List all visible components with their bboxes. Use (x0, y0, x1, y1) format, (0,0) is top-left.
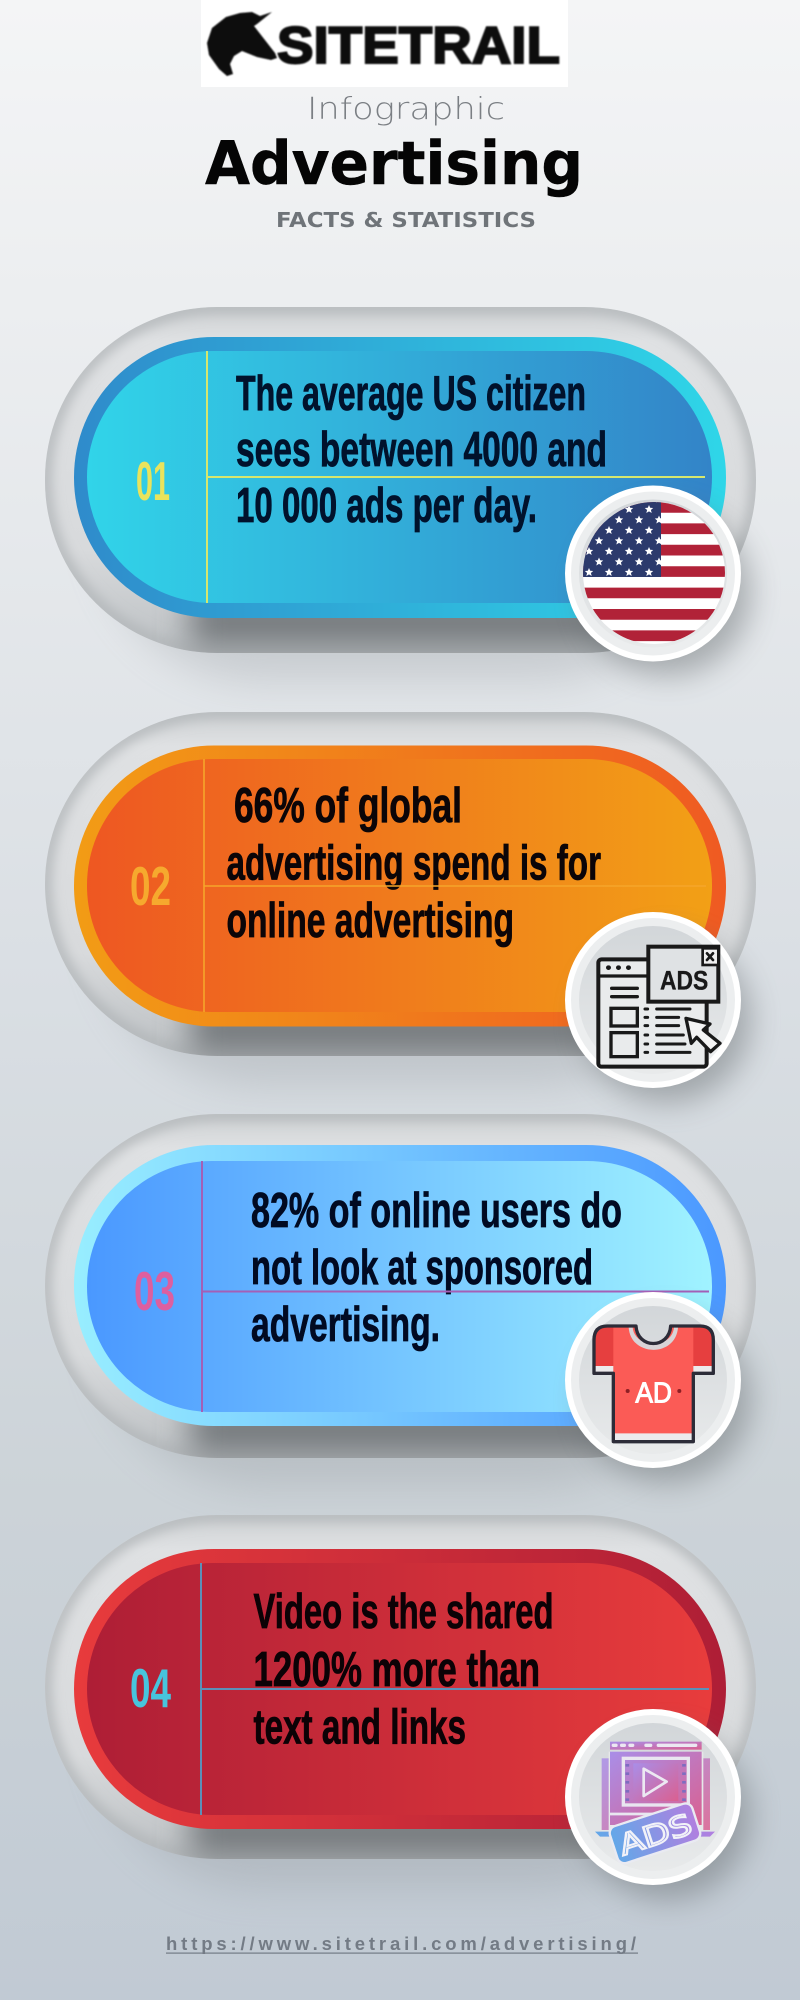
fact text 3: advertising. (251, 1298, 440, 1352)
icon: video ads badge (565, 1709, 751, 1900)
fact text 3: not look at sponsored (251, 1241, 593, 1295)
title: Advertising: Advertising (205, 129, 583, 199)
fact text 4: 1200% more than (254, 1643, 540, 1697)
icon: t-shirt badge: AD (635, 1378, 672, 1410)
fact text 1: sees between 4000 and (236, 423, 607, 477)
subtitle: FACTS & STATISTICS (276, 208, 536, 232)
fact text 2: advertising spend is for (226, 836, 601, 890)
heading: Infographic: Infographic (307, 92, 505, 127)
fact text 2 (226, 779, 601, 948)
panel: card 3 (45, 1114, 756, 1487)
fact text 4 (254, 1585, 554, 1754)
fact text 4: Video is the shared (254, 1585, 554, 1639)
fact text 1: The average US citizen (236, 367, 586, 421)
logo wordmark: SITETRAIL (277, 17, 560, 75)
fact text 3 (251, 1184, 622, 1352)
panel: card 4 (45, 1515, 756, 1888)
fact text 2: 66% of global (234, 779, 462, 833)
icon: ads browser window badge (565, 912, 751, 1103)
number 03: 03 (134, 1260, 175, 1322)
panel: card 2 (45, 712, 756, 1085)
fact text 1 (236, 367, 607, 533)
fact text 4: text and links (254, 1700, 466, 1754)
number 02: 02 (130, 855, 171, 917)
icon: t-shirt badge (565, 1292, 751, 1483)
icon: US flag badge (565, 486, 751, 676)
icon: unicorn head (207, 12, 277, 76)
icon: ads browser window badge: ADS (660, 965, 708, 995)
fact text 1: 10 000 ads per day. (236, 479, 537, 533)
logo: SITETRAIL (201, 0, 568, 87)
number 04: 04 (130, 1657, 171, 1719)
number 01: 01 (136, 450, 170, 512)
source url: https://www.sitetrail.com/advertising/ (166, 1933, 636, 1954)
panel: card 1 (45, 307, 756, 680)
icon: video ads badge: ADS (615, 1807, 696, 1862)
fact text 2: online advertising (226, 894, 514, 948)
fact text 3: 82% of online users do (251, 1184, 622, 1238)
